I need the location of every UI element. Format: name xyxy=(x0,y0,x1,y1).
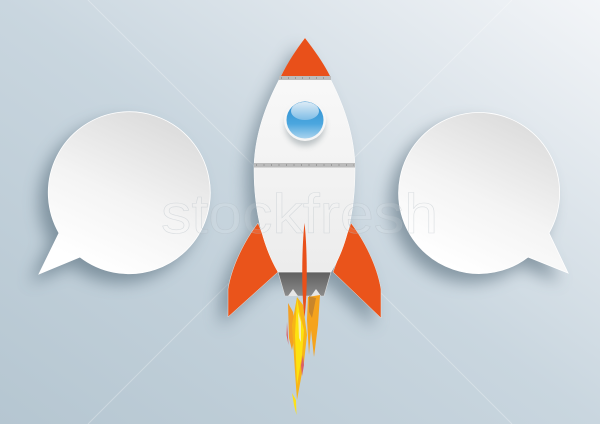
upper band xyxy=(279,76,331,80)
centre fin xyxy=(302,223,307,317)
nozzle xyxy=(278,272,331,296)
speech bubble: left xyxy=(30,112,210,283)
speech bubble: right xyxy=(390,113,568,283)
rocket body xyxy=(254,38,355,272)
lower band xyxy=(254,163,355,168)
right fin xyxy=(333,223,381,318)
nose cone xyxy=(281,38,330,76)
rocket xyxy=(220,38,381,415)
watermark: stockfresh xyxy=(161,182,438,245)
left fin xyxy=(228,223,278,317)
porthole xyxy=(284,99,326,146)
flames xyxy=(286,295,320,415)
rocket shadow xyxy=(220,47,373,327)
